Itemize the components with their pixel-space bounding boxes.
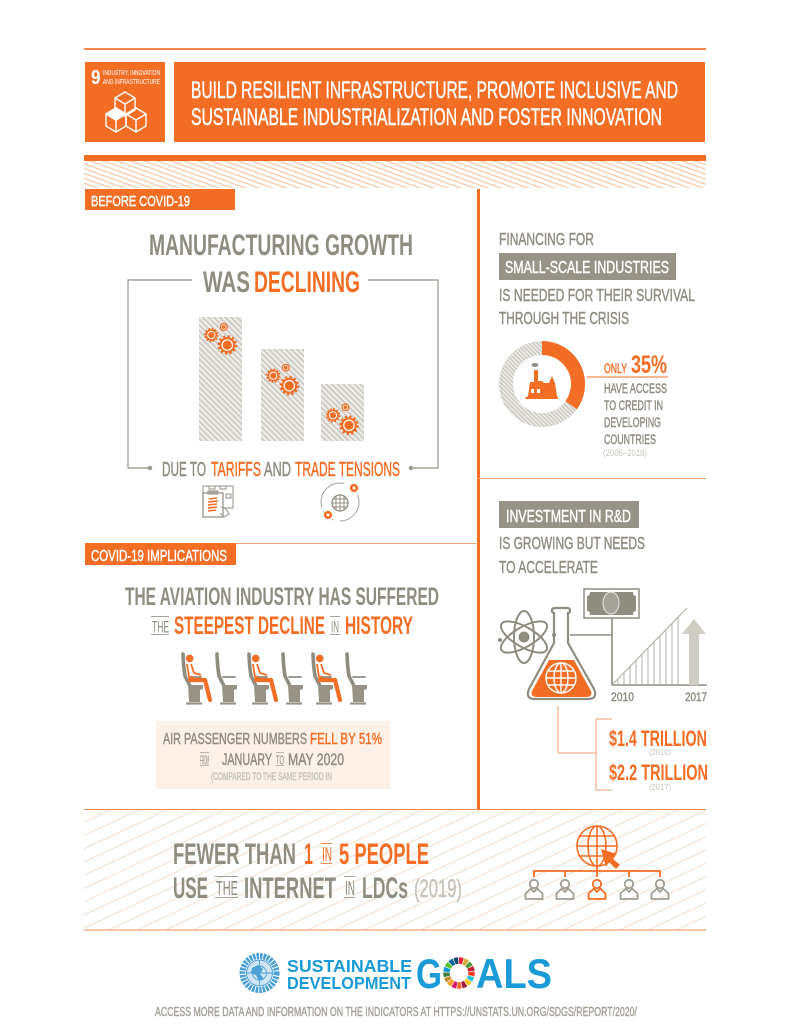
- header: top rule: [84, 48, 706, 50]
- heading: financing for small-scale industries: [499, 229, 695, 328]
- header band with hatching: [84, 155, 706, 188]
- stats: trillion figures: $2.2 TRILLION: [609, 760, 708, 785]
- bracket frame: [128, 280, 438, 470]
- text: fewer than 1 in 5 people: THE: [216, 878, 238, 900]
- heading: aviation decline: [125, 583, 439, 640]
- stats: trillion figures: [609, 726, 708, 792]
- caption: due to tariffs and trade tensions: AND: [264, 459, 291, 481]
- callout: air passenger numbers: AIR PASSENGER NUMBERS: [163, 731, 307, 748]
- heading: investment in r&d: [499, 501, 645, 577]
- text: fewer than 1 in 5 people: FEWER THAN: [173, 838, 296, 871]
- callout: air passenger numbers: JANUARY: [222, 751, 272, 769]
- callout: air passenger numbers: (COMPARED TO THE SAME PERIOD IN: [211, 771, 332, 783]
- label: covid-19 implications: COVID-19 IMPLICATIONS: [91, 548, 227, 565]
- stat: only 35%: 35%: [631, 351, 667, 379]
- logo: sustainable development goals: SUSTAINABLE: [287, 956, 412, 976]
- heading: manufacturing growth: MANUFACTURING GROWTH: [149, 229, 413, 262]
- panel: investment in r&d: [496, 501, 708, 792]
- icon: flask with globe: [528, 608, 595, 699]
- heading: aviation decline: THE AVIATION INDUSTRY HAS SUFFERED: [125, 583, 439, 611]
- heading: manufacturing growth: WAS: [203, 266, 250, 299]
- text: fewer than 1 in 5 people: 5 PEOPLE: [339, 838, 429, 871]
- panel: manufacturing growth: [128, 229, 438, 521]
- column and section dividers: [85, 189, 706, 809]
- stats: trillion figures: (2010): [649, 747, 671, 757]
- heading: financing for small-scale industries: SMALL-SCALE INDUSTRIES: [505, 257, 669, 277]
- text: fewer than 1 in 5 people: (2019): [414, 875, 462, 903]
- heading: aviation decline: HISTORY: [345, 612, 413, 640]
- heading: financing for small-scale industries: THROUGH THE CRISIS: [499, 308, 629, 328]
- stat: only 35%: DEVELOPING: [604, 414, 661, 430]
- callout: air passenger numbers: FELL BY 51%: [310, 731, 382, 748]
- caption: due to tariffs and trade tensions: TRADE TENSIONS: [295, 459, 400, 481]
- callout: air passenger numbers: TO: [276, 754, 284, 768]
- stat: only 35%: TO CREDIT IN: [604, 397, 663, 413]
- stat: only 35%: ONLY: [604, 360, 627, 376]
- logo: sustainable development goals: [287, 950, 552, 997]
- callout: air passenger numbers: MAY 2020: [288, 751, 344, 769]
- text: fewer than 1 in 5 people: LDCs: [362, 872, 408, 905]
- stats: trillion figures: (2017): [649, 782, 671, 792]
- heading: investment in r&d: INVESTMENT IN R&D: [506, 506, 631, 526]
- icon: trade globe: [321, 483, 359, 521]
- goal 9 badge: AND INFRASTRUCTURE: [103, 79, 160, 86]
- donut chart: 35%: [506, 348, 578, 420]
- panel: internet use: [84, 809, 706, 930]
- icon: airplane seats with passengers: [183, 654, 367, 704]
- line chart: growth 2010 to 2017: 2010: [611, 690, 634, 704]
- goal 9 badge: INDUSTRY, INNOVATION: [103, 70, 160, 77]
- callout: air passenger numbers: [156, 721, 390, 789]
- heading: aviation decline: THE: [152, 618, 169, 636]
- logo: un emblem: [242, 956, 276, 990]
- icon: globe and cursor with people network: [526, 826, 668, 899]
- logo: sustainable development goals: G: [416, 950, 442, 997]
- logo: sustainable development goals: ALS: [476, 950, 552, 997]
- stat: only 35%: HAVE ACCESS: [604, 380, 667, 396]
- stat: only 35%: (2006–2018): [603, 448, 647, 458]
- text: fewer than 1 in 5 people: 1: [304, 838, 313, 871]
- heading: manufacturing growth: [149, 229, 413, 299]
- text: fewer than 1 in 5 people: INTERNET: [244, 872, 336, 905]
- caption: due to tariffs and trade tensions: [162, 459, 400, 481]
- bar chart with gears: [199, 317, 364, 441]
- text: fewer than 1 in 5 people: IN: [345, 878, 355, 900]
- icon: banknote: [584, 589, 639, 618]
- stat: only 35%: [587, 351, 668, 458]
- goal 9 badge: 9: [91, 67, 100, 89]
- connector bracket: [558, 706, 612, 790]
- caption: due to tariffs and trade tensions: TARIFFS: [211, 459, 261, 481]
- title banner: [174, 62, 705, 142]
- heading: investment in r&d: TO ACCELERATE: [499, 557, 598, 577]
- line chart: growth 2010 to 2017: [570, 608, 707, 704]
- text: fewer than 1 in 5 people: [173, 838, 462, 905]
- icon: tariffs clipboard: [203, 486, 233, 517]
- icon: factory: [525, 363, 558, 399]
- stat: only 35%: COUNTRIES: [604, 431, 656, 447]
- heading: aviation decline: STEEPEST DECLINE: [174, 612, 325, 640]
- callout: air passenger numbers: FROM: [200, 754, 209, 768]
- text: fewer than 1 in 5 people: USE: [173, 872, 208, 905]
- logo: sustainable development goals: DEVELOPMENT: [287, 973, 411, 993]
- panel: aviation: [125, 583, 439, 789]
- panel: financing: [499, 229, 695, 458]
- icon: atom: [496, 611, 552, 663]
- label: before covid-19: BEFORE COVID-19: [91, 193, 190, 210]
- heading: investment in r&d: IS GROWING BUT NEEDS: [499, 533, 645, 553]
- icon: sdg colour wheel: [446, 960, 472, 986]
- caption: due to tariffs and trade tensions: DUE TO: [162, 459, 206, 481]
- heading: manufacturing growth: DECLINING: [254, 266, 360, 299]
- label: covid-19 implications: [85, 543, 236, 565]
- icon: stacked cubes: [106, 92, 146, 132]
- heading: financing for small-scale industries: IS NEEDED FOR THEIR SURVIVAL: [499, 285, 695, 305]
- heading: financing for small-scale industries: FINANCING FOR: [499, 229, 594, 249]
- line chart: growth 2010 to 2017: 2017: [685, 690, 707, 704]
- stats: trillion figures: $1.4 TRILLION: [609, 726, 707, 751]
- heading: aviation decline: IN: [331, 618, 339, 636]
- text: fewer than 1 in 5 people: IN: [322, 844, 332, 866]
- goal 9 badge: [85, 62, 165, 142]
